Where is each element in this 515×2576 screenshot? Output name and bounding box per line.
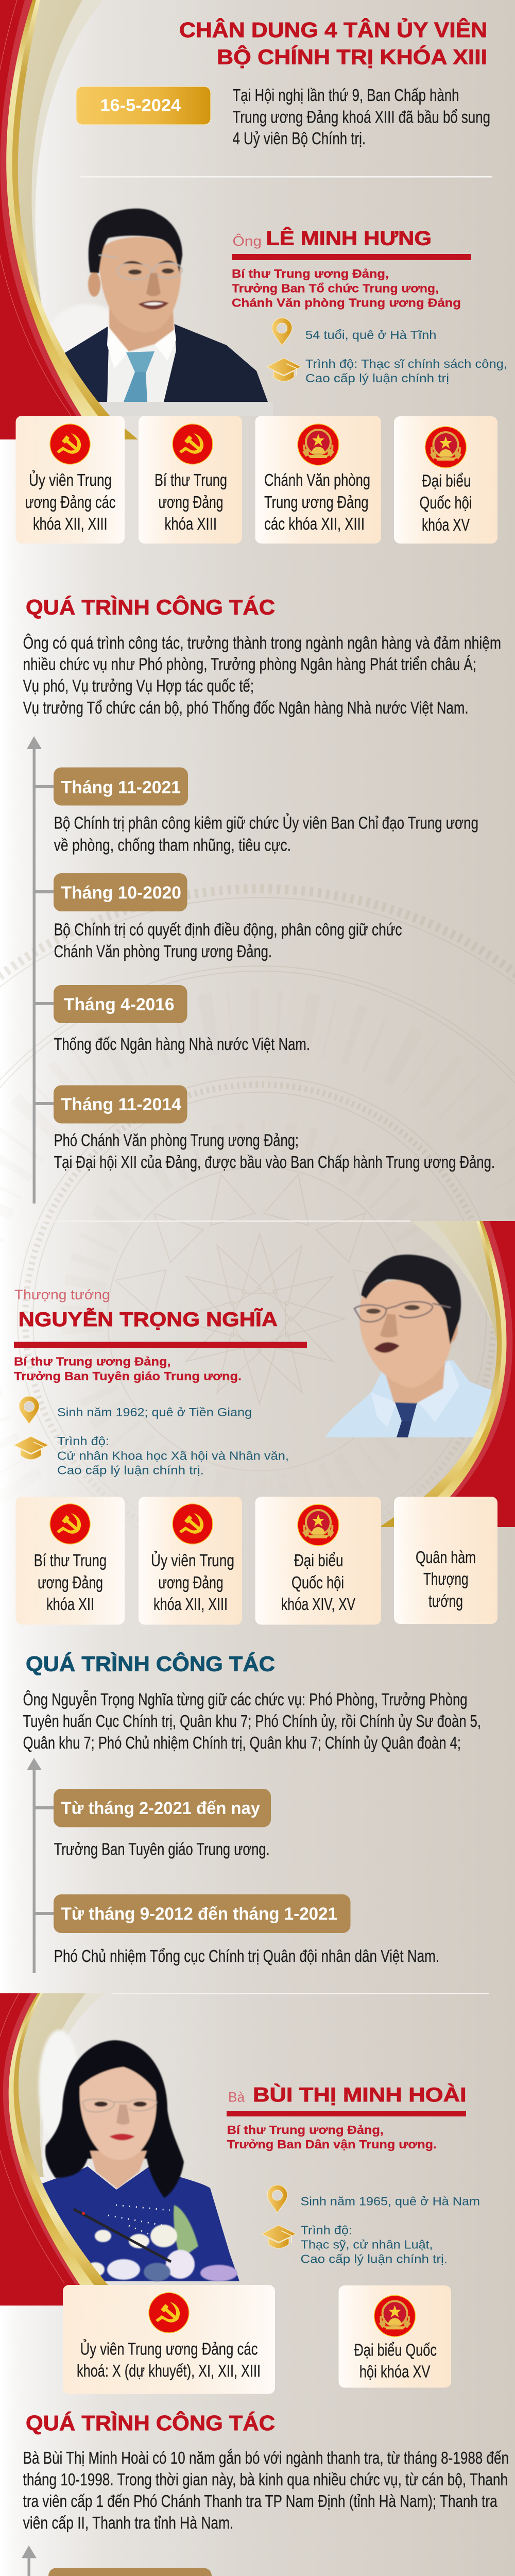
card: Bí thư Trung ương [139,416,242,544]
card: Bí thư Trung ương: khóa XII [46,1595,94,1614]
icon: graduation cap [267,358,301,381]
card: Đại biểu Quốc hội: hội khóa XV [359,2362,431,2381]
timeline item: Từ tháng 2-2021 đến nay: Từ tháng 2-2021 đến nay [61,1799,260,1818]
card: Quân hàm Thượng tướng: Thượng [423,1569,469,1588]
decorative curve: red and gold band section 1 [0,0,138,439]
timeline item: Tháng 11-2021 [54,768,478,854]
card: Quân hàm Thượng tướng [394,1497,497,1624]
card: Ủy viên Trung ương: ương Đảng [158,1573,224,1592]
card: Ủy viên Trung ương: khóa XII, XIII [153,1595,228,1614]
timeline item: Tháng 11-2014 [54,1085,495,1172]
name: Bùi Thị Minh Hoài: Bà [228,2090,245,2105]
arrow: timeline [27,1758,54,1973]
positions: Trưởng Ban Tuyên giáo Trung ương. [14,1369,242,1383]
education: Trình độ: Thạc sĩ chính sách công, [305,357,507,370]
icon: graduation cap [262,2225,296,2248]
education: Cao cấp lý luận chính trị [305,371,449,385]
card: Ủy viên Trung ương [15,416,125,544]
panel: section 2 Nguyễn Trọng Nghĩa hero [14,1221,515,1625]
card: Chánh Văn phòng: Trung ương Đảng [264,493,369,512]
timeline item: Tháng 10-2020: Tháng 10-2020 [61,883,181,903]
heading: QUÁ TRÌNH CÔNG TÁC [26,2411,275,2435]
decorative curve: red and gold band section 3 [0,1993,131,2306]
name: Lê Minh Hưng: Ông [233,233,262,249]
card: Ủy viên Trung ương: Ủy viên Trung ương Đảng các [80,2340,258,2359]
panel: section 1 Lê Minh Hưng hero [0,0,507,544]
timeline item: Tháng 10-2020: Chánh Văn phòng Trung ương Đảng. [54,942,272,961]
birth and hometown: Sinh năm 1965, quê ở Hà Nam [301,2195,480,2208]
age and hometown: 54 tuổi, quê ở Hà Tĩnh [305,328,437,342]
card: Chánh Văn phòng: Chánh Văn phòng [264,470,370,489]
positions: Chánh Văn phòng Trung ương Đảng [232,296,461,309]
education: Trình độ: [57,1434,109,1448]
timeline item: Từ tháng 9-2012 đến tháng 1-2021: Từ tháng 9-2012 đến tháng 1-2021 [61,1904,337,1924]
card: Đại biểu Quốc hội [339,2285,451,2387]
title [179,18,487,69]
card: Đại biểu Quốc hội: Đại biểu [294,1551,343,1570]
panel: career Nguyễn Trọng Nghĩa [23,1652,481,1973]
intro text [233,86,490,148]
timeline item: Từ tháng 9-2012 đến tháng 1-2021 [54,1894,439,1965]
timeline item: Từ tháng 2-2021 đến nay [54,1789,271,1859]
decorative curve: tan ribbons section 3 [0,1993,105,2177]
name: Lê Minh Hưng: LÊ MINH HƯNG [266,227,432,249]
card: Đại biểu Quốc hội [394,416,497,544]
photo: Bùi Thị Minh Hoài [31,2030,239,2281]
name: Nguyễn Trọng Nghĩa: Thượng tướng [14,1287,110,1302]
card: Đại biểu Quốc hội: Đại biểu Quốc [354,2341,437,2360]
intro paragraph: Vụ phó, Vụ trưởng Vụ Hợp tác quốc tế; [23,676,254,696]
birth and hometown: Sinh năm 1962; quê ở Tiền Giang [57,1405,252,1419]
card: Đại biểu Quốc hội: khóa XV [422,515,470,534]
arrow: timeline [22,2546,48,2576]
decorative curve: tan ribbons section 2 [410,1221,515,1350]
education: Cử nhân Khoa học Xã hội và Nhân văn, [57,1449,289,1462]
timeline item: Tháng 11-2021: về phòng, chống tham nhũng, tiêu cực. [54,836,291,854]
positions: Trưởng Ban Tổ chức Trung ương, [232,281,439,295]
intro paragraph [23,1690,481,1752]
name: Bùi Thị Minh Hoài [227,2083,467,2116]
title: BỘ CHÍNH TRỊ KHÓA XIII [217,45,487,69]
card: Bí thư Trung ương: khóa XIII [165,514,217,533]
intro paragraph: viên cấp II, Thanh tra tỉnh Hà Nam. [23,2513,233,2532]
card: Đại biểu Quốc hội: Quốc hội [419,493,472,512]
panel: section 3 Bùi Thị Minh Hoài hero [0,1993,489,2394]
timeline item: Tháng 11-2021: Tháng 11-2021 [61,778,181,798]
heading: QUÁ TRÌNH CÔNG TÁC [26,596,275,619]
date badge: 16-5-2024 [100,96,181,115]
card: Ủy viên Trung ương: Ủy viên Trung [151,1551,234,1570]
timeline item: Tháng 10-2020 [54,873,402,961]
intro text: 4 Uỷ viên Bộ Chính trị. [233,129,366,148]
education [301,2224,448,2266]
education: Trình độ: [301,2224,352,2237]
timeline item: Tháng 10-2020: Bộ Chính trị có quyết định điều động, phân công giữ chức [54,920,402,939]
card: Quân hàm Thượng tướng: tướng [428,1591,463,1611]
timeline item: Tháng 4-2016: Tháng 4-2016 [64,995,175,1014]
positions [14,1354,242,1383]
card: Chánh Văn phòng [255,416,381,544]
card: Bí thư Trung ương: ương Đảng [159,493,224,512]
icon: location pin [19,1396,39,1424]
panel: career Bùi Thị Minh Hoài [22,2411,509,2576]
card: Đại biểu Quốc hội: Đại biểu [422,471,471,490]
timeline item: Tháng 4-2016: Thống đốc Ngân hàng Nhà nước Việt Nam. [54,1035,310,1054]
photo: Lê Minh Hưng [46,209,273,416]
panel: career Lê Minh Hưng [23,596,501,1204]
positions: Bí thư Trung ương Đảng, [14,1354,171,1368]
education [57,1434,289,1477]
education [305,357,507,385]
icon: location pin [272,318,292,346]
timeline item: Tháng 4-2016 [54,985,310,1054]
name: Nguyễn Trọng Nghĩa [14,1287,307,1348]
card: Ủy viên Trung ương: khoá: X (dự khuyết), XI, XII, XIII [77,2361,261,2380]
icon: graduation cap [14,1436,48,1460]
timeline item: Tháng 11-2014: Phó Chánh Văn phòng Trung ương Đảng; [54,1130,299,1149]
date badge [76,87,211,125]
card: Quân hàm Thượng tướng: Quân hàm [416,1548,476,1567]
heading: QUÁ TRÌNH CÔNG TÁC [26,1652,275,1675]
timeline item: Từ tháng 2-2021 đến nay: Trưởng Ban Tuyên giáo Trung ương. [54,1840,270,1859]
name: Nguyễn Trọng Nghĩa: NGUYỄN TRỌNG NGHĨA [19,1308,278,1331]
card: Ủy viên Trung ương: Ủy viên Trung [29,470,112,489]
intro text: Tại Hội nghị lần thứ 9, Ban Chấp hành [233,86,459,105]
card: Bí thư Trung ương [15,1497,125,1625]
name: Bùi Thị Minh Hoài: BÙI THỊ MINH HOÀI [253,2083,467,2106]
positions: Bí thư Trung ương Đảng, [227,2123,384,2137]
positions: Bí thư Trung ương Đảng, [232,267,389,280]
name: Lê Minh Hưng [232,227,471,260]
arrow: timeline [27,736,54,1204]
card: Ủy viên Trung ương [63,2285,275,2394]
intro paragraph [23,633,501,717]
decorative curve: red and gold band section 2 [380,1221,515,1527]
education: Thạc sỹ, cử nhân Luật, [301,2238,433,2251]
title: CHÂN DUNG 4 TÂN ỦY VIÊN [179,18,487,42]
card: Ủy viên Trung ương [139,1497,242,1625]
card: Bí thư Trung ương: Bí thư Trung [154,470,227,489]
card: Bí thư Trung ương: Bí thư Trung [34,1551,107,1570]
background pattern: bronze drum [0,884,515,1497]
card: Ủy viên Trung ương: ương Đảng các [25,493,115,512]
card: Đại biểu Quốc hội: khóa XIV, XV [281,1595,355,1614]
card: Đại biểu Quốc hội: Quốc hội [291,1573,344,1592]
decorative curve: tan ribbons section 1 [0,0,103,314]
intro paragraph [23,2448,509,2532]
timeline item: Tháng 11-2014: Tháng 11-2014 [61,1095,181,1114]
positions [232,267,461,309]
card: Bí thư Trung ương: ương Đảng [38,1573,103,1592]
education: Cao cấp lý luận chính trị. [301,2252,448,2266]
icon: location pin [267,2185,287,2213]
card: Chánh Văn phòng: các khóa XII, XIII [264,514,365,533]
timeline item: Từ 4-2021 đến nay [48,2568,454,2576]
positions [227,2123,437,2151]
photo: Nguyễn Trọng Nghĩa [325,1255,495,1437]
card: Ủy viên Trung ương: khóa XII, XIII [33,514,107,533]
card: Đại biểu Quốc hội [255,1497,381,1625]
positions: Trưởng Ban Dân vận Trung ương. [227,2138,437,2151]
education: Cao cấp lý luận chính trị. [57,1463,204,1477]
